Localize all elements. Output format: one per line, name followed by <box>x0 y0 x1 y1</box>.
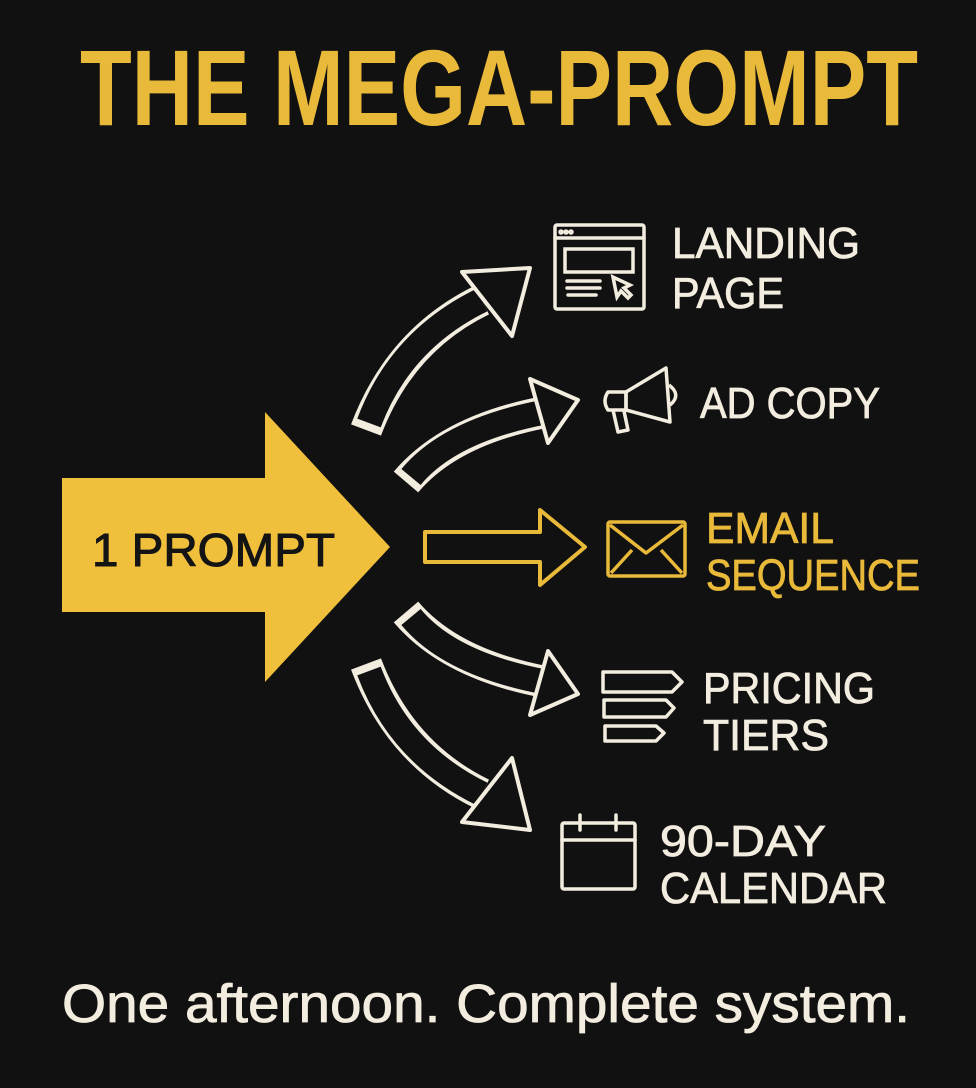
text: ad copy: AD COPY <box>700 379 880 428</box>
big arrow: 1 prompt <box>62 412 390 682</box>
text: 90-day calendar: CALENDAR <box>660 864 887 913</box>
text: 90-day calendar <box>660 817 887 913</box>
text: landing page <box>672 219 860 318</box>
arrow: to email sequence <box>425 510 585 585</box>
icon: megaphone <box>605 368 676 432</box>
arrow: to pricing tiers <box>406 612 578 715</box>
text: pricing tiers: PRICING <box>703 664 875 713</box>
text: landing page: PAGE <box>672 269 784 318</box>
arrow: to landing page <box>366 268 530 430</box>
icon: pricing tiers <box>603 672 682 741</box>
text: pricing tiers: TIERS <box>703 711 829 760</box>
text: 90-day calendar: 90-DAY <box>660 817 826 866</box>
text: email sequence: EMAIL <box>706 504 834 553</box>
footer tagline: One afternoon. Complete system. <box>62 974 910 1034</box>
arrow: to calendar <box>366 664 530 830</box>
text: email sequence <box>706 504 920 600</box>
icon: browser window <box>555 225 644 309</box>
icon: calendar <box>562 815 635 889</box>
big arrow: 1 prompt: 1 PROMPT <box>92 524 335 576</box>
icon: envelope <box>608 522 685 576</box>
text: email sequence: SEQUENCE <box>706 551 920 600</box>
text: landing page: LANDING <box>672 219 860 268</box>
arrow: to ad copy <box>406 379 578 482</box>
text: pricing tiers <box>703 664 875 760</box>
